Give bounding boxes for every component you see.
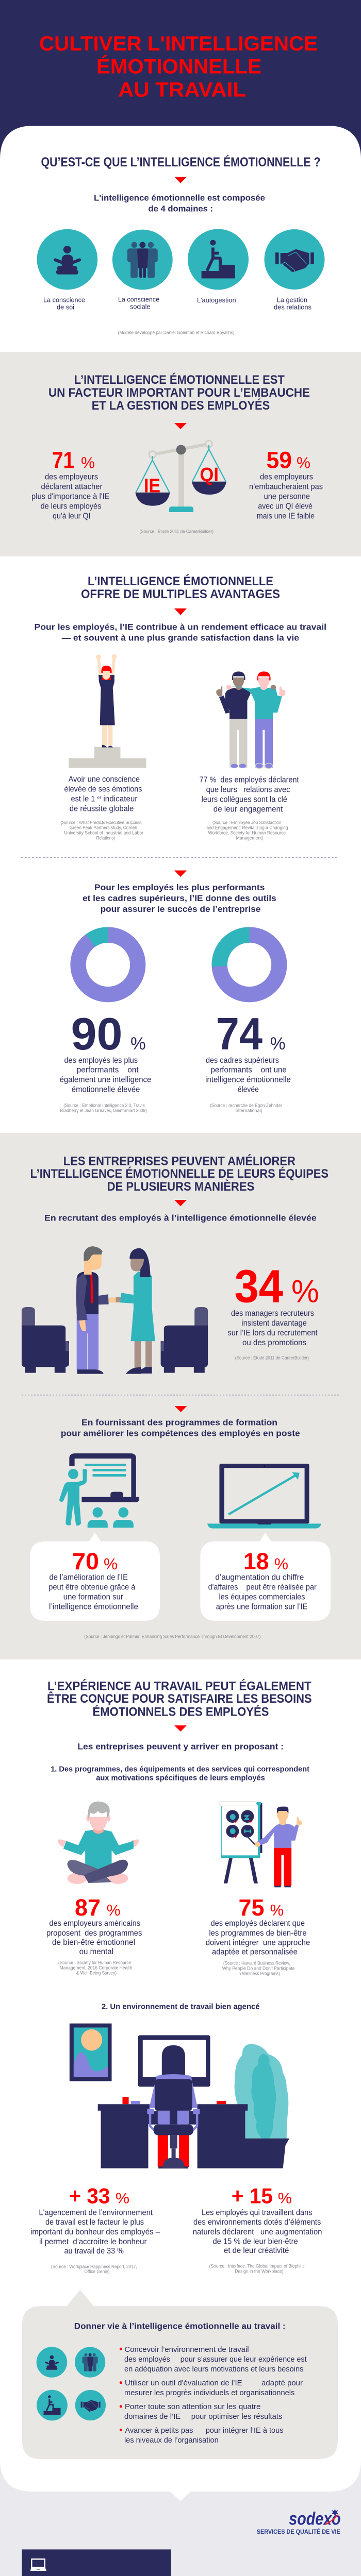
source note: right: (Source : recherche de Egon Zehnder — [210, 1103, 282, 1108]
subheading: employees — [34, 622, 326, 642]
stat: 75 percent — [206, 1894, 310, 1957]
source note: left: Management, 2016 Corporate Health — [60, 1965, 132, 1971]
stat: 87 percent: ou mental — [79, 1947, 113, 1956]
stat: 75 percent: % — [270, 1901, 284, 1919]
label: self awareness: La conscience — [43, 296, 85, 303]
source note: right — [206, 820, 288, 840]
source note: left: Relations) — [96, 835, 115, 840]
text: colleagues stat: leurs collègues sont la clé — [202, 795, 287, 804]
callout: 70 percent: une formation sur — [63, 1593, 123, 1602]
subheading: training: En fournissant des programmes de formation — [81, 1418, 277, 1427]
logo: sodexo — [257, 2509, 341, 2535]
source note: (Source : Étude 2011 de CareerBuilder) — [139, 529, 214, 534]
stat: 59 percent: une personne — [264, 493, 310, 501]
stat: 71 percent: des employeurs — [45, 473, 98, 482]
stat: 59 percent — [249, 447, 323, 521]
source note: right: (Source : Interface, The Global Impact of Biophilic — [209, 2263, 305, 2268]
subheading: top performers: pour assurer le succès de l’entreprise — [101, 905, 260, 914]
text: self awareness stat: indicateur — [103, 795, 137, 804]
callout heading: Donner vie à l’intelligence émotionnelle au travail : — [74, 2321, 286, 2331]
stat: 90 percent: également une intelligence — [60, 1076, 151, 1084]
list item: environment — [120, 2346, 307, 2374]
illustration: balance scale — [135, 440, 226, 512]
stat: plus 15 percent: Les employés qui travaillent dans — [202, 2208, 313, 2217]
stat: 90 percent: % — [130, 1034, 146, 1054]
icon: meditating person — [37, 229, 97, 290]
stat: 90 percent: 90 — [71, 1008, 123, 1059]
heading: UN FACTEUR IMPORTANT POUR L’EMBAUCHE — [48, 386, 310, 400]
panel: what is emotional intelligence — [0, 126, 361, 352]
source note: left — [60, 1103, 147, 1113]
stat: 90 percent: des employés les plus — [64, 1056, 138, 1065]
title: ÉMOTIONNELLE — [96, 55, 261, 78]
stat: 87 percent — [46, 1894, 142, 1956]
source note: right — [209, 2263, 305, 2274]
text: self awareness stat — [64, 775, 142, 814]
list item: four domains — [120, 2403, 282, 2421]
icon: group of people — [75, 2347, 105, 2378]
colleague on the left — [216, 671, 251, 768]
text: self awareness stat: er — [97, 796, 102, 800]
stat: 71 percent: % — [81, 454, 95, 472]
domains row — [37, 229, 325, 311]
monitor — [138, 2035, 210, 2087]
callout: 18 percent: % — [274, 1555, 288, 1573]
subheading: employees: — et souvent à une plus grande satisfaction dans la vie — [62, 633, 299, 642]
source note: right: (Source : Employee Job Satisfaction — [212, 820, 282, 825]
stat: 34 percent: % — [291, 1274, 319, 1310]
seated person on chair — [147, 2045, 200, 2168]
subheading: four domains: L'intelligence émotionnelle est composée — [94, 194, 265, 203]
subheading: four domains: de 4 domaines : — [149, 204, 213, 213]
stat: 87 percent: % — [107, 1901, 121, 1919]
stat: 75 percent: des employés déclarent que — [210, 1919, 305, 1928]
heading — [48, 372, 310, 413]
stat: 71 percent: déclarent attacher — [41, 483, 102, 492]
list item: evaluation tool — [120, 2379, 303, 2397]
stat: 90 percent: émotionnelle élevée — [72, 1086, 140, 1094]
label: social awareness: La conscience — [118, 295, 159, 303]
arrow — [174, 423, 187, 429]
heading: DE PLUSIEURS MANIÈRES — [107, 1179, 254, 1194]
heading — [81, 574, 280, 601]
framed picture — [70, 2024, 112, 2081]
arrow — [174, 1406, 187, 1412]
list item: small steps: les niveaux de l’organisation — [124, 2436, 219, 2445]
heading: L’INTELLIGENCE ÉMOTIONNELLE EST — [74, 372, 285, 387]
icon: person climbing step — [188, 229, 249, 290]
callout: 18 percent: après une formation sur l’IE — [216, 1603, 307, 1612]
stat: 74 percent: 74 — [216, 1008, 262, 1059]
stat: 74 percent: élevée — [238, 1086, 259, 1094]
title: AU TRAVAIL — [118, 78, 246, 101]
panel: benefits — [21, 574, 338, 1113]
illustration: balance scale: IE — [144, 475, 160, 497]
callout: 70 percent — [30, 1533, 160, 1621]
source note: left: Office Genie) — [84, 2269, 110, 2274]
list item: four domains: domaines de l’IE pour optimiser les résultats — [124, 2413, 282, 2421]
footer background — [0, 2421, 361, 2576]
illustration: laptop with rising arrow — [207, 1464, 321, 1529]
chart: donut 74 percent — [212, 927, 279, 994]
label: relationship management: des relations — [274, 303, 311, 311]
panel: workplace experience — [0, 1659, 361, 2501]
source note: right: in Wellness Programs) — [238, 1971, 280, 1976]
subheading: programs: aux motivations spécifiques de leurs employés — [96, 1774, 265, 1783]
heading: L’EXPÉRIENCE AU TRAVAIL PEUT ÉGALEMENT — [47, 1679, 311, 1693]
list item: four domains: Porter toute son attention sur les quatre — [125, 2403, 260, 2411]
source note: right — [222, 1961, 295, 1976]
icon: meditating person — [37, 2347, 67, 2378]
stat: plus 33 percent: au travail de 33 % — [64, 2247, 124, 2256]
stat: 59 percent: mais une IE faible — [257, 512, 315, 521]
subheading: Les entreprises peuvent y arriver en proposant : — [77, 1742, 284, 1751]
stat: plus 15 percent: et de leur créativité — [224, 2246, 289, 2255]
heading: L’INTELLIGENCE ÉMOTIONNELLE — [88, 574, 273, 588]
callout: 18 percent: les équipes commerciales — [219, 1593, 305, 1602]
man — [76, 1246, 116, 1374]
subheading: programs: 1. Des programmes, des équipements et des services qui correspondent — [51, 1765, 309, 1774]
callout: 70 percent: peut être obtenue grâce à — [48, 1583, 136, 1592]
left armchair — [22, 1307, 69, 1373]
source note: right: (Source : Harvard Business Review, — [223, 1961, 290, 1966]
text: self awareness stat: de réussite globale — [70, 805, 134, 814]
subheading: programs — [51, 1765, 309, 1783]
label: self management: L'autogestion — [197, 296, 236, 304]
stat: plus 33 percent: de travail est le facteur le plus — [45, 2218, 144, 2227]
label: relationship management — [274, 296, 311, 311]
source note: (Source : Jennings et Palmer, Enhancing Sales Performance Through EI Development 2007) — [84, 1634, 260, 1639]
stat: 59 percent: n’embaucheraient pas — [249, 483, 323, 492]
stat: plus 15 percent: de 15 % de leur bien-être — [212, 2237, 298, 2246]
subheading: top performers — [83, 883, 276, 914]
subheading: employees: Pour les employés, l’IE contribue à un rendement efficace au travail — [34, 622, 326, 632]
illustration: classroom — [59, 1453, 139, 1528]
stat: 74 percent — [205, 1008, 291, 1094]
illustration: man presenting flipchart — [219, 1802, 302, 1887]
plant — [235, 2044, 288, 2139]
source note: right: Design in the Workplace) — [235, 2268, 284, 2274]
callout: 18 percent: 18 — [243, 1548, 269, 1574]
stat: plus 15 percent: + 15 — [232, 2184, 273, 2208]
title: CULTIVER L'INTELLIGENCE — [39, 32, 318, 55]
logo: sodexo: sodexo — [289, 2509, 341, 2529]
info box — [22, 2549, 171, 2576]
stat: 74 percent: % — [270, 1034, 286, 1054]
arrow — [174, 871, 187, 877]
panel: hiring factor — [0, 352, 361, 556]
source note: left: Bradberry et Jean Greaves,TalentSmart 2009) — [60, 1108, 147, 1113]
stat: 90 percent — [60, 1008, 151, 1094]
heading: ÉMOTIONNELS DES EMPLOYÉS — [93, 1705, 269, 1719]
stat: 71 percent: 71 — [52, 447, 74, 473]
source note: left: University School of Industrial and Labor — [64, 830, 143, 835]
stat: 71 percent: qu'à leur QI — [53, 512, 91, 521]
label: self awareness: de soi — [57, 303, 74, 311]
source note: right: Management) — [236, 835, 263, 840]
subheading: recruiting: En recrutant des employés à l’intelligence émotionnelle élevée — [44, 1213, 317, 1223]
panel: how companies can improve — [0, 1133, 361, 1659]
stat: 75 percent: adaptée et personnalisée — [212, 1948, 298, 1957]
subheading: top performers: Pour les employés les plus performants — [94, 883, 265, 892]
icon: handshake — [75, 2390, 106, 2420]
source note: left: Green Peak Partners study, Cornell — [70, 825, 137, 830]
desk — [98, 2097, 289, 2168]
stat: plus 33 percent — [30, 2184, 160, 2256]
heading: ET LA GESTION DES EMPLOYÉS — [92, 398, 270, 413]
source note: left — [58, 1960, 132, 1976]
stat: 59 percent: avec un QI élevé — [258, 502, 313, 511]
subheading: four domains — [94, 194, 265, 213]
illustration: woman on podium — [69, 654, 146, 768]
callout: 18 percent — [200, 1533, 331, 1621]
stat: 74 percent: performants ont une — [210, 1066, 287, 1075]
stat: 75 percent: 75 — [238, 1894, 264, 1921]
list item: environment: Concevoir l’environnement de travail — [125, 2346, 249, 2354]
stat: 59 percent: % — [297, 454, 310, 472]
source note: (Source : Étude 2011 de CareerBuilder) — [235, 1355, 309, 1360]
heading: LES ENTREPRISES PEUVENT AMÉLIORER — [63, 1154, 296, 1168]
arrow — [174, 608, 187, 615]
callout: 70 percent: 70 — [72, 1548, 99, 1574]
label: relationship management: La gestion — [277, 296, 307, 304]
source note: right: International) — [236, 1108, 262, 1113]
stat: plus 15 percent — [193, 2184, 322, 2255]
logo: sodexo: SERVICES DE QUALITÉ DE VIE — [257, 2529, 340, 2535]
stat: plus 33 percent: important du bonheur des employés – — [30, 2228, 160, 2236]
stat: 90 percent: performants ont — [77, 1066, 139, 1075]
stat: 87 percent: proposent des programmes — [46, 1929, 142, 1938]
callout: 18 percent: d'affaires peut être réalisée par — [208, 1583, 317, 1592]
stat: 34 percent: sur l’IE lors du recrutement — [228, 1329, 318, 1337]
stat: 87 percent: 87 — [75, 1894, 101, 1921]
text: colleagues stat — [200, 775, 299, 814]
subheading: training — [61, 1418, 300, 1438]
arrow — [174, 177, 187, 183]
stat: 34 percent: 34 — [234, 1261, 283, 1313]
text: colleagues stat: 77 % des employés déclarent — [200, 775, 299, 784]
header band — [0, 0, 361, 165]
heading: OFFRE DE MULTIPLES AVANTAGES — [81, 587, 280, 601]
icon: laptop — [30, 2558, 46, 2571]
stat: 34 percent: des managers recruteurs — [231, 1309, 314, 1318]
heading: L’INTELLIGENCE ÉMOTIONNELLE DE LEURS ÉQUIPES — [30, 1166, 329, 1181]
stat: 59 percent: des employeurs — [260, 473, 313, 482]
source note: left — [61, 820, 143, 840]
stat: 87 percent: de bien-être émotionnel — [52, 1938, 135, 1947]
label: social awareness: sociale — [130, 303, 151, 311]
stat: 59 percent: 59 — [266, 447, 292, 473]
illustration: balance scale: QI — [200, 464, 219, 486]
illustration: two colleagues — [216, 671, 286, 769]
heading: ÊTRE CONÇUE POUR SATISFAIRE LES BESOINS — [47, 1691, 311, 1706]
label: self awareness — [43, 296, 85, 311]
callout: bringing emotional intelligence to life — [22, 2290, 338, 2459]
source note: right: Why People Do and Don't Participate — [222, 1966, 295, 1971]
stat: plus 33 percent: + 33 — [69, 2184, 110, 2208]
subheading: training: pour améliorer les compétences des employés en poste — [61, 1429, 300, 1438]
source note: left: (Source : Workplace Happiness Report, 2017, — [51, 2264, 137, 2269]
text: self awareness stat: est le 1 — [71, 795, 95, 804]
source note: right: and Engagement: Revitalizing a Changing — [206, 825, 288, 830]
stat: 71 percent: de leurs employés — [41, 502, 102, 511]
stat: 75 percent: les programmes de bien-être — [209, 1929, 307, 1938]
arrow — [174, 1725, 187, 1732]
icon: group of people — [112, 230, 173, 290]
source note: right — [210, 1103, 282, 1113]
text: self awareness stat: élevée de ses émotions — [64, 785, 142, 794]
subheading: environment: 2. Un environnement de travail bien agencé — [102, 2002, 260, 2011]
stat: plus 33 percent: il permet d’accroitre le bonheur — [39, 2238, 146, 2246]
stat: plus 33 percent: % — [116, 2191, 129, 2207]
arrow — [174, 1200, 187, 1206]
list item: small steps: Avancer à petits pas pour intégrer l’IE à tous — [125, 2427, 284, 2435]
source note: (Modèle développé par Daniel Goleman et Richard Boyatzis) — [118, 330, 235, 335]
chart: donut 90 percent — [78, 927, 138, 994]
source note: left: (Source : What Predicts Executive Success, — [61, 820, 142, 825]
list item: evaluation tool: Utiliser un outil d'évaluation de l’IE adapté pour — [125, 2379, 303, 2387]
stat: plus 15 percent: % — [278, 2191, 292, 2207]
stat: 71 percent — [31, 447, 109, 521]
stat: plus 15 percent: naturels déclarent une augmentation — [193, 2228, 322, 2236]
title — [39, 32, 318, 101]
stat: 34 percent: ou des promotions — [242, 1338, 306, 1347]
callout: 18 percent: d’augmentation du chiffre — [215, 1573, 304, 1582]
source note: left — [51, 2264, 137, 2274]
stat: 71 percent: plus d'importance à l'IE — [31, 493, 109, 501]
heading: definition: QU’EST-CE QUE L’INTELLIGENCE ÉMOTIONNELLE ? — [41, 155, 321, 170]
callout: 70 percent: l’intelligence émotionnelle — [49, 1603, 138, 1612]
callout: 70 percent: % — [104, 1555, 118, 1573]
list item: environment: en adéquation avec leurs motivations et leurs besoins — [124, 2365, 303, 2374]
right armchair — [161, 1307, 208, 1373]
stat: plus 33 percent: L'agencement de l’environnement — [39, 2208, 153, 2217]
illustration: recruitment handshake — [22, 1246, 208, 1374]
callout: 70 percent: de l’amélioration de l’IE — [50, 1573, 128, 1582]
stat: 87 percent: des employeurs américains — [50, 1919, 140, 1928]
list item: small steps — [120, 2427, 284, 2445]
subheading: top performers: et les cadres supérieurs, l’IE donne des outils — [83, 894, 276, 903]
source note: left: (Source : Emotional Intelligence 2.0, Travis — [63, 1103, 145, 1108]
colleague on the right — [226, 671, 286, 769]
list item: evaluation tool: mesurer les progrès individuels et organisationnels — [124, 2389, 294, 2397]
stat: 34 percent: insistent davantage — [241, 1319, 307, 1328]
stat: plus 15 percent: des environnements dotés d’éléments — [193, 2218, 321, 2227]
stat: 74 percent: des cadres supérieurs — [206, 1056, 279, 1065]
list item: environment: des employés pour s’assurer que leur expérience est — [124, 2355, 307, 2364]
woman — [116, 1248, 155, 1374]
label: social awareness — [118, 295, 159, 311]
source note: right: Workforce, Society for Human Resource — [208, 830, 286, 835]
text: self awareness stat: Avoir une conscience — [69, 775, 140, 784]
stat: 34 percent — [228, 1261, 319, 1347]
icon: handshake — [264, 229, 325, 290]
stat: 74 percent: intelligence émotionnelle — [205, 1076, 291, 1084]
icon: person climbing step — [37, 2390, 68, 2420]
text: colleagues stat: que leurs relations avec — [206, 785, 290, 794]
text: colleagues stat: de leur engagement — [214, 805, 283, 814]
source note: left: (Source : Society for Human Resource — [58, 1960, 131, 1965]
illustration: meditating man — [58, 1802, 139, 1884]
illustration: office desk scene — [70, 2024, 289, 2168]
source note: left: & Well-Being Survey) — [76, 1971, 117, 1976]
heading — [30, 1154, 329, 1194]
stat: 75 percent: doivent intégrer une approche — [206, 1938, 310, 1947]
heading — [47, 1679, 311, 1719]
